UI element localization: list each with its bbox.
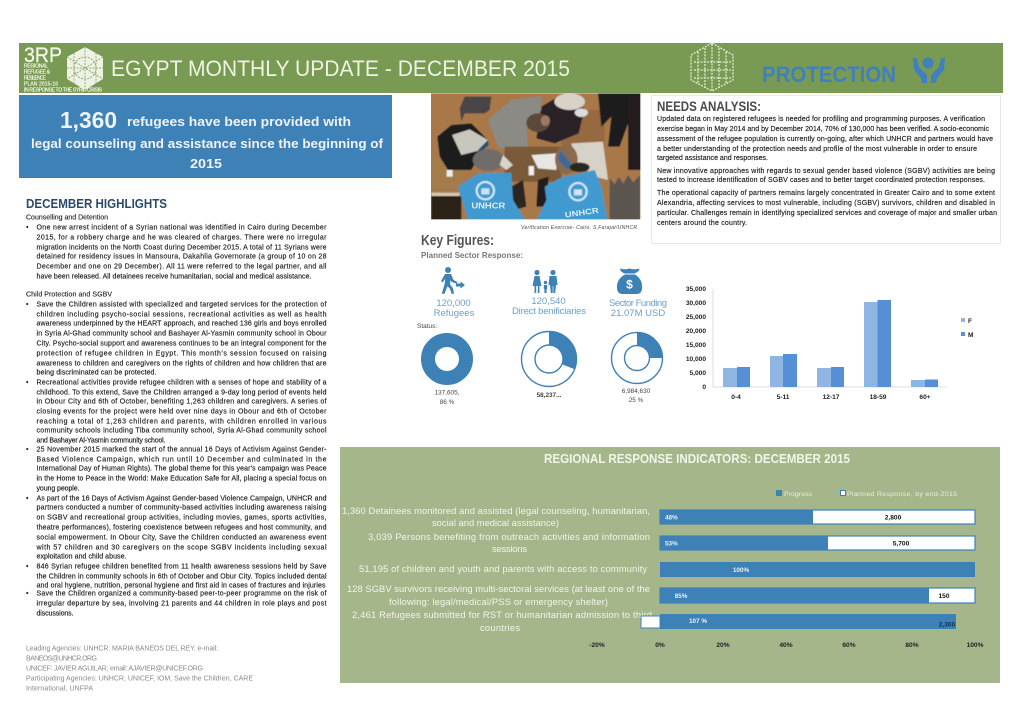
text block: child protection and SGBV: protection of refugee children in Egypt. This month's session focused on raising <box>36 350 327 358</box>
text block: child protection and SGBV: children including psycho-social sessions, recreational activities as well as health <box>36 312 327 318</box>
text block: child protection and SGBV: 846 Syrian refugee children benefited from 11 health awareness sessions held by Save <box>36 564 327 570</box>
text block: child protection and SGBV: the Children in community schools in 6th of October and Obur City. Topics included dental <box>36 574 327 580</box>
headline callout: 2015 <box>190 157 222 171</box>
x axis labels: 18-59 <box>870 394 887 401</box>
y axis labels: 5,000 <box>689 370 706 377</box>
bar: resettlement submissions: 2,300 <box>939 622 956 628</box>
x axis: 40% <box>779 642 793 649</box>
panel: needs analysis: centers around the country. <box>657 220 747 227</box>
text block: child protection and SGBV <box>26 292 327 618</box>
indicator labels: sessions <box>492 543 527 554</box>
bar: detainees: 48% <box>665 514 678 522</box>
x axis labels: 0-4 <box>731 394 741 401</box>
footer: agency contacts: Leading Agencies: UNHCR: MARIA BANEOS DEL REY, e-mail: <box>26 646 218 652</box>
figure: direct beneficiaries: Direct benificiaries <box>512 306 586 317</box>
bar: outreach <box>660 536 975 550</box>
y axis labels: 0 <box>702 384 706 391</box>
x axis: 60% <box>842 642 856 649</box>
donut: refugees status <box>428 340 466 406</box>
text block: child protection and SGBV: Save the Children organized a community-based peer-to-peer programme on the risk of <box>36 590 327 598</box>
3RP logo: REFUGEE & <box>24 70 51 76</box>
donut: direct beneficiaries status <box>522 332 577 399</box>
text block: child protection and SGBV: • <box>26 590 29 598</box>
bar: children and youth <box>660 562 975 577</box>
heading: december highlights: DECEMBER HIGHLIGHTS <box>26 196 167 211</box>
bar: detainees <box>660 510 975 524</box>
legend: F <box>968 318 972 325</box>
legend: M <box>968 332 974 339</box>
x axis <box>589 642 984 649</box>
3RP logo: IN RESPONSE TO THE SYRIA CRISIS <box>24 88 103 94</box>
text block: child protection and SGBV: discussions. <box>36 610 74 618</box>
legend: Planned Response, by end-2015 <box>847 491 957 498</box>
indicator labels: countries <box>480 622 520 633</box>
x axis: 20% <box>716 642 730 649</box>
bar: children and youth: 100% <box>733 567 749 574</box>
panel: regional response indicators <box>340 447 1000 683</box>
3RP logo: RESILIENCE <box>24 76 47 82</box>
text block: child protection and SGBV: • <box>26 380 29 386</box>
bar: detainees: 2,800 <box>885 514 902 522</box>
bar: outreach: 53% <box>665 540 678 548</box>
icon: money bag <box>617 268 642 294</box>
3RP logo: REGIONAL <box>24 64 48 70</box>
panel: needs analysis: targeted assistance and responses. <box>657 155 768 162</box>
heading: needs analysis: NEEDS ANALYSIS: <box>657 98 761 114</box>
text block: child protection and SGBV: City. Psycho-social support and awareness continues to be an integral component for the <box>36 340 327 348</box>
text block: child protection and SGBV: closing events for the project were held over nine days in Obour and 6th of October <box>36 408 327 416</box>
headline callout: legal counseling and assistance since the beginning of <box>31 137 384 151</box>
panel: needs analysis: Updated data on registered refugees is needed for profiling and programming purposes. A verification <box>657 116 985 123</box>
figure: refugees <box>434 298 475 319</box>
headline callout: refugees have been provided with <box>127 115 351 129</box>
heading: key figures: Key Figures: <box>421 233 494 249</box>
indicator labels: social and medical assistance) <box>432 517 559 528</box>
text block: child protection and SGBV: awareness to children and caregivers on the rights of children and how children that are <box>36 360 327 368</box>
donut: sector funding status: 6,984,630 <box>622 388 651 395</box>
figure: sector funding <box>609 298 667 319</box>
text block: child protection and SGBV: community schools including Tiba community school, Syria Al-Ghad community school <box>36 428 327 434</box>
footer: agency contacts: International, UNFPA <box>26 686 93 692</box>
bar: resettlement submissions <box>641 614 956 629</box>
photo caption: Verification Exercise- Cairo, S.Farajat/UNHCR <box>521 225 637 231</box>
x axis labels: 5-11 <box>777 394 790 401</box>
y axis labels: 10,000 <box>686 356 706 363</box>
indicator labels: 1,360 Detainees monitored and assisted (legal counseling, humanitarian, <box>342 505 650 516</box>
donut: sector funding status <box>612 332 662 404</box>
y axis labels: 30,000 <box>686 300 706 307</box>
icon: money bag: $ <box>626 278 633 292</box>
y axis labels: 35,000 <box>686 286 706 293</box>
donut: refugees status: 137,605, <box>435 390 460 396</box>
footer: agency contacts: Participating Agencies: UNHCR, UNICEF, IOM, Save the Children, CARE <box>26 676 253 682</box>
y axis labels: 15,000 <box>686 342 706 349</box>
panel: needs analysis: tested to increase identification of SGBV cases and to better target coordinated protection responses. <box>657 177 985 184</box>
text block: child protection and SGBV: in the Home to Peace in the World: Make Education Safe for All, placing a special focus on <box>36 476 327 482</box>
legend <box>961 318 974 339</box>
y axis labels: 20,000 <box>686 328 706 335</box>
y axis labels: 25,000 <box>686 314 706 321</box>
bar chart: population by age and gender <box>686 286 974 401</box>
text block: child protection and SGBV: Recreational activities provide refugee children with a senses of hope and stability of a <box>36 380 327 386</box>
text block: child protection and SGBV: young people. <box>36 486 80 492</box>
panel: needs analysis <box>652 96 1000 244</box>
indicator labels: 51,195 of children and youth and parents with access to community <box>359 563 647 574</box>
indicator labels: 128 SGBV survivors receiving multi-sectoral services (at least one of the <box>347 583 650 594</box>
bar: SGBV survivors: 85% <box>675 593 688 600</box>
icon: family <box>532 270 558 293</box>
x axis labels: 60+ <box>919 394 931 401</box>
bar: resettlement submissions: 107 % <box>689 618 707 625</box>
text block: child protection and SGBV: • <box>26 446 29 454</box>
text block: child protection and SGBV: International Day of Human Rights). The global theme for this year's campaign was Peace <box>36 466 327 472</box>
figure: direct beneficiaries <box>512 296 586 317</box>
title: EGYPT MONTHLY UPDATE - DECEMBER 2015 <box>111 56 570 81</box>
x axis labels <box>731 394 931 401</box>
3RP logo <box>24 44 103 94</box>
indicator labels <box>342 505 652 633</box>
donut: refugees status: 86 % <box>440 399 455 406</box>
x axis: -20% <box>589 642 605 649</box>
text block: counselling and detention <box>26 214 327 280</box>
text block: child protection and SGBV: in Obour City and 6th of October, benefiting 1,263 children and caregivers. A series of <box>36 398 327 406</box>
text block: child protection and SGBV: and Bashayer Al-Yasmin community school. <box>36 438 166 444</box>
text block: child protection and SGBV: 25 November 2015 marked the start of the annual 16 Days of Activism Against Gender- <box>36 446 327 454</box>
bar: SGBV survivors <box>660 588 975 603</box>
text block: child protection and SGBV: partners conducted a number of community-based activities including awareness raising <box>36 504 327 512</box>
text block: child protection and SGBV: and oral hygiene, nutrition, personal hygiene and first aid in cases of fractures and injuries <box>36 582 326 590</box>
indicator labels: following: legal/medical/PSS or emergency shelter) <box>389 596 608 607</box>
text block: counselling and detention: December and one on 29 December). All 11 were referred to the legal partner, and all <box>36 264 327 270</box>
3RP logo: PLAN 2015-16 <box>24 82 58 88</box>
figure: refugees: Refugees <box>434 308 475 319</box>
donut: sector funding status: 25 % <box>629 397 644 404</box>
header banner <box>19 43 1003 94</box>
footer: agency contacts <box>26 646 253 692</box>
panel: needs analysis: The operational capacity of partners remains largely concentrated in Greater Cairo and to some extent <box>657 190 995 197</box>
section label: protection: PROTECTION <box>762 62 896 87</box>
footer: agency contacts: BANEOS@UNHCR.ORG <box>26 656 97 662</box>
text block: child protection and SGBV: being discriminated can be protected. <box>36 370 157 376</box>
right logo emblem <box>691 43 733 91</box>
label: status: Status: <box>417 323 437 330</box>
bars: female <box>723 302 925 387</box>
headline callout: 1,360 <box>60 107 117 133</box>
text block: child protection and SGBV: awareness underpinned by the HEART approach, and reached 136 girls and boys enrolled <box>36 320 327 328</box>
text block: child protection and SGBV: childhood. To this extend, Save the Children arranged a 9-day long period of events held <box>36 390 327 396</box>
figure: refugees: 120,000 <box>436 298 471 309</box>
bars: male <box>737 300 938 387</box>
x axis: 0% <box>655 642 665 649</box>
text block: child protection and SGBV: with 57 children and 30 caregivers on the scope SGBV incidents including sexual <box>36 544 327 552</box>
text block: child protection and SGBV: in Syria Al-Ghad community school and Bashayer Al-Yasmin community school in Obour <box>36 330 327 338</box>
bar: outreach: 5,700 <box>893 540 910 548</box>
text block: child protection and SGBV: Child Protection and SGBV <box>26 292 112 298</box>
legend <box>776 490 957 498</box>
icon: protecting hands <box>913 58 945 83</box>
footer: agency contacts: UNICEF: JAVIER AGUILAR, email: AJAVIER@UNICEF.ORG <box>26 666 203 672</box>
text block: child protection and SGBV: on SGBV and recreational group activities, including movies, games, sports activities, <box>36 514 327 522</box>
indicator labels: 3,039 Persons benefiting from outreach activities and information <box>368 531 650 542</box>
text block: counselling and detention: migration incidents on the North Coast during December 2015. A total of 11 Syrians were <box>36 244 327 252</box>
text block: child protection and SGBV: Based Violence Campaign, which run until 10 December and culminated in the <box>36 456 327 464</box>
x axis: 80% <box>905 642 919 649</box>
panel: needs analysis: exercise began in May 2014 and by December 2014, 70% of 130,000 has been verified. A socio-economic <box>657 126 990 133</box>
text block: child protection and SGBV: • <box>26 564 29 570</box>
panel: needs analysis: particular. Challenges remain in identifying specialized services and coverage of major and smaller urban <box>657 210 997 217</box>
text block: counselling and detention: One new arrest incident of a Syrian national was identified in Cairo during December <box>36 224 327 232</box>
text block: child protection and SGBV: irregular departure by sea, involving 21 parents and 44 children in role plays and post <box>36 600 327 608</box>
text block: counselling and detention: 2015, for a robbery charge and he was cleared of charges. There were no irregular <box>36 234 327 242</box>
figure: sector funding: 21.07M USD <box>611 308 665 319</box>
3RP logo: 3RP <box>24 44 62 67</box>
text block: counselling and detention: Counselling and Detention <box>26 214 108 222</box>
text block: counselling and detention: • <box>26 224 29 232</box>
y axis labels <box>686 286 706 391</box>
subheading: planned sector response: Planned Sector Response: <box>421 251 523 260</box>
text block: child protection and SGBV: • <box>26 496 29 502</box>
text block: counselling and detention: detained for residency issues in Mansoura, Dakahlia Governorate (a group of 10 on 28 <box>36 254 327 260</box>
text block: child protection and SGBV: • <box>26 302 29 308</box>
panel title: REGIONAL RESPONSE INDICATORS: DECEMBER 2015 <box>544 452 850 466</box>
indicator labels: 2,461 Refugees submitted for RST or humanitarian admission to third <box>352 609 652 620</box>
text block: child protection and SGBV: theatre performances), fostering coexistence between refugees and host community, and <box>36 524 327 532</box>
text block: counselling and detention: have been released. All detainees receive humanitarian, social and medical assistance. <box>36 274 312 280</box>
bar: SGBV survivors: 150 <box>938 593 950 600</box>
x axis: 100% <box>967 642 984 649</box>
panel: needs analysis: assessment of the refugee population is currently on-going, after which UNHCR and partners would have <box>657 136 993 143</box>
photo: verification exercise: UNHCR <box>564 206 599 220</box>
x axis labels: 12-17 <box>823 394 840 401</box>
panel: needs analysis: a better understanding of the protection needs and profile of the most vulnerable in order to ensure <box>657 146 977 153</box>
legend: Progress <box>784 491 813 498</box>
text block: child protection and SGBV: reaching a total of 1,263 children and parents, with children enrolled in various <box>36 418 327 426</box>
text block: child protection and SGBV: exploitation and child abuse. <box>36 554 127 560</box>
icon: refugee walking <box>441 267 465 294</box>
text block: child protection and SGBV: Save the Children assisted with specialized and targeted services for the protection of <box>36 302 327 308</box>
headline callout <box>19 95 392 178</box>
figure: direct beneficiaries: 120,540 <box>531 296 566 307</box>
text block: child protection and SGBV: social empowerment. In Obour City, Save the Children conducted an awareness event <box>36 534 327 542</box>
photo: verification exercise <box>428 90 644 220</box>
panel: needs analysis: New innovative approaches with regards to sexual gender based violence (SGBV) activities are being <box>657 168 995 175</box>
text block: child protection and SGBV: As part of the 16 Days of Activism Against Gender-based Violence Campaign, UNHCR and <box>36 496 327 502</box>
donut: direct beneficiaries status: 58,237... <box>537 392 562 399</box>
panel: needs analysis: Alexandria, affecting services to most vulnerable, including (SGBV) survivors, children and disabled in <box>657 200 995 207</box>
vest lettering: UNHCR <box>471 201 506 210</box>
figure: sector funding: Sector Funding <box>609 298 667 309</box>
